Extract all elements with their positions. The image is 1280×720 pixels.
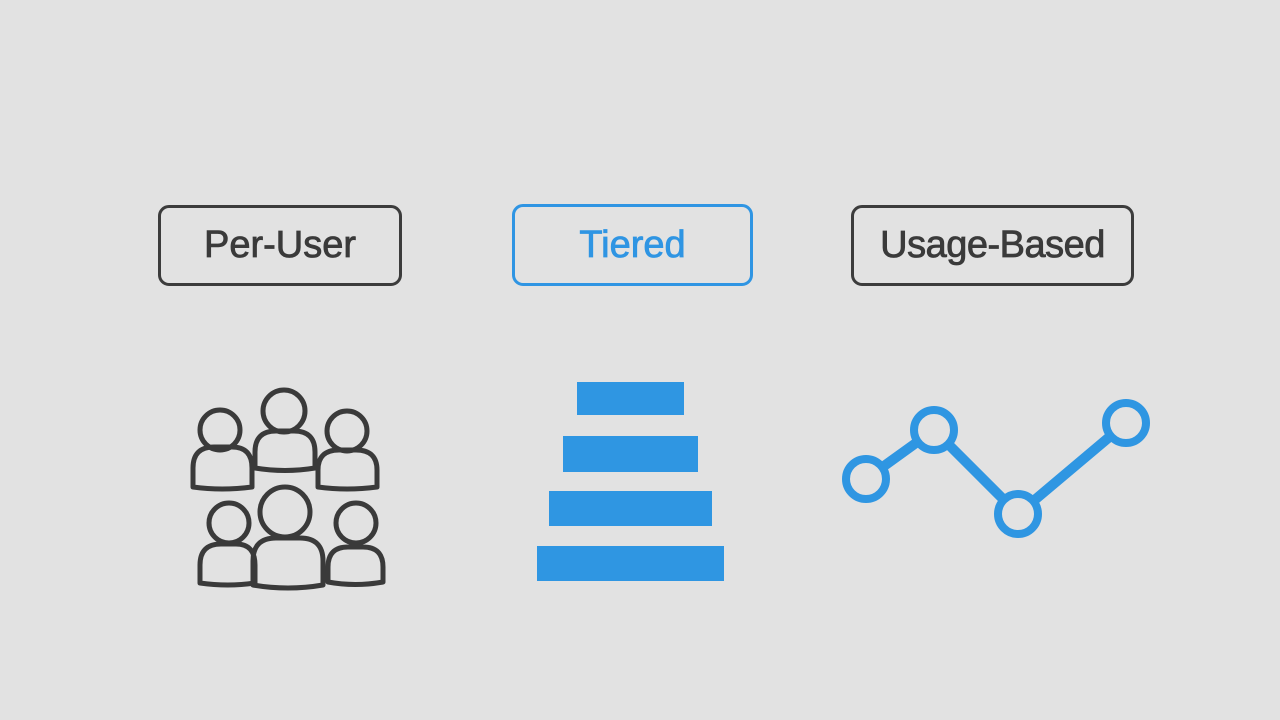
label: Usage-Based: Usage-Based — [880, 224, 1105, 266]
label: Tiered: Tiered — [579, 224, 686, 266]
label: Per-User — [158, 205, 402, 286]
label: Per-User: Per-User — [204, 224, 356, 266]
icon: group of people — [193, 390, 383, 588]
label: Usage-Based — [851, 205, 1134, 286]
label: Tiered — [512, 204, 753, 286]
icon: tiers — [537, 382, 724, 581]
icon: usage line chart — [846, 403, 1146, 534]
